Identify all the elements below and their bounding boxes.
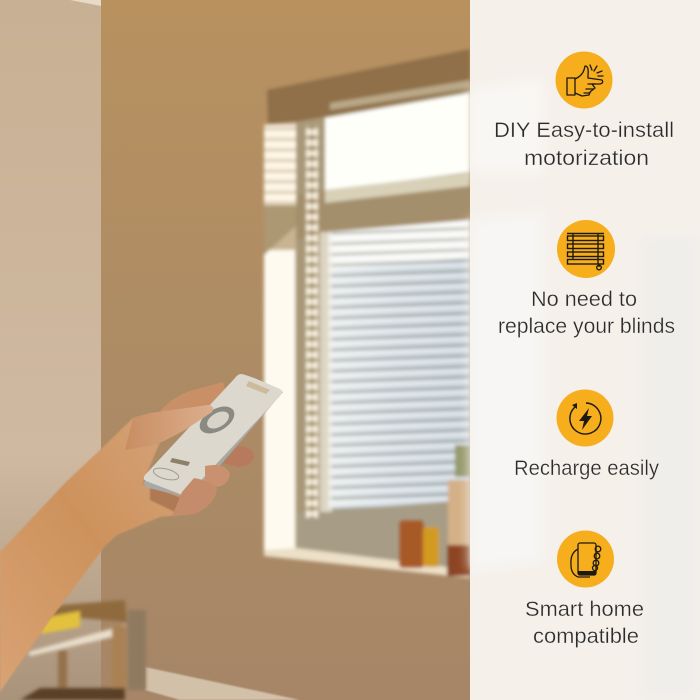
jars on sill — [399, 445, 470, 576]
remote control — [143, 374, 283, 498]
control ring — [195, 401, 239, 439]
text: DIY label: DIY Easy-to-install — [494, 119, 674, 142]
palm shadow — [143, 470, 188, 512]
panel: translucent feature column — [470, 0, 700, 700]
mid frame — [296, 172, 470, 240]
icon: blinds — [557, 220, 615, 278]
fingers — [223, 446, 254, 467]
lower closed slats — [296, 500, 470, 572]
side table — [20, 600, 146, 700]
back wall — [100, 0, 470, 700]
lower pane — [328, 220, 470, 513]
window — [264, 49, 470, 578]
text: DIY label — [494, 119, 674, 170]
upper pane — [325, 93, 470, 190]
text: recharge label: Recharge easily — [514, 457, 659, 480]
skirting board — [145, 667, 300, 700]
text: smart home label: Smart home — [525, 598, 644, 621]
icon: thumbs up hand — [556, 52, 612, 108]
photo: room background with window and hand — [0, 0, 470, 700]
icon: recharge bolt — [556, 390, 614, 446]
text: DIY label: motorization — [524, 147, 649, 170]
icon: hand with phone — [557, 530, 614, 588]
feature: DIY easy-to-install — [494, 52, 674, 170]
blind body — [296, 90, 470, 572]
arm and palm — [0, 415, 213, 692]
window sill — [264, 548, 470, 578]
side wall — [0, 0, 101, 700]
white dots columns — [306, 125, 318, 520]
feature: no need to replace blinds — [498, 220, 675, 338]
thumb — [125, 405, 213, 450]
left reveal — [264, 122, 296, 555]
text: blinds label: No need to — [531, 288, 637, 311]
feature: recharge easily — [514, 390, 659, 480]
text: smart home label: compatible — [533, 625, 639, 648]
hand holding remote — [0, 374, 283, 692]
ghost window shapes — [470, 80, 700, 700]
text: smart home label — [525, 598, 644, 648]
index finger behind remote — [158, 382, 226, 425]
feature: smart home compatible — [525, 530, 644, 648]
text: blinds label: replace your blinds — [498, 315, 675, 338]
text: blinds label — [498, 288, 675, 338]
window head rail — [267, 49, 470, 128]
